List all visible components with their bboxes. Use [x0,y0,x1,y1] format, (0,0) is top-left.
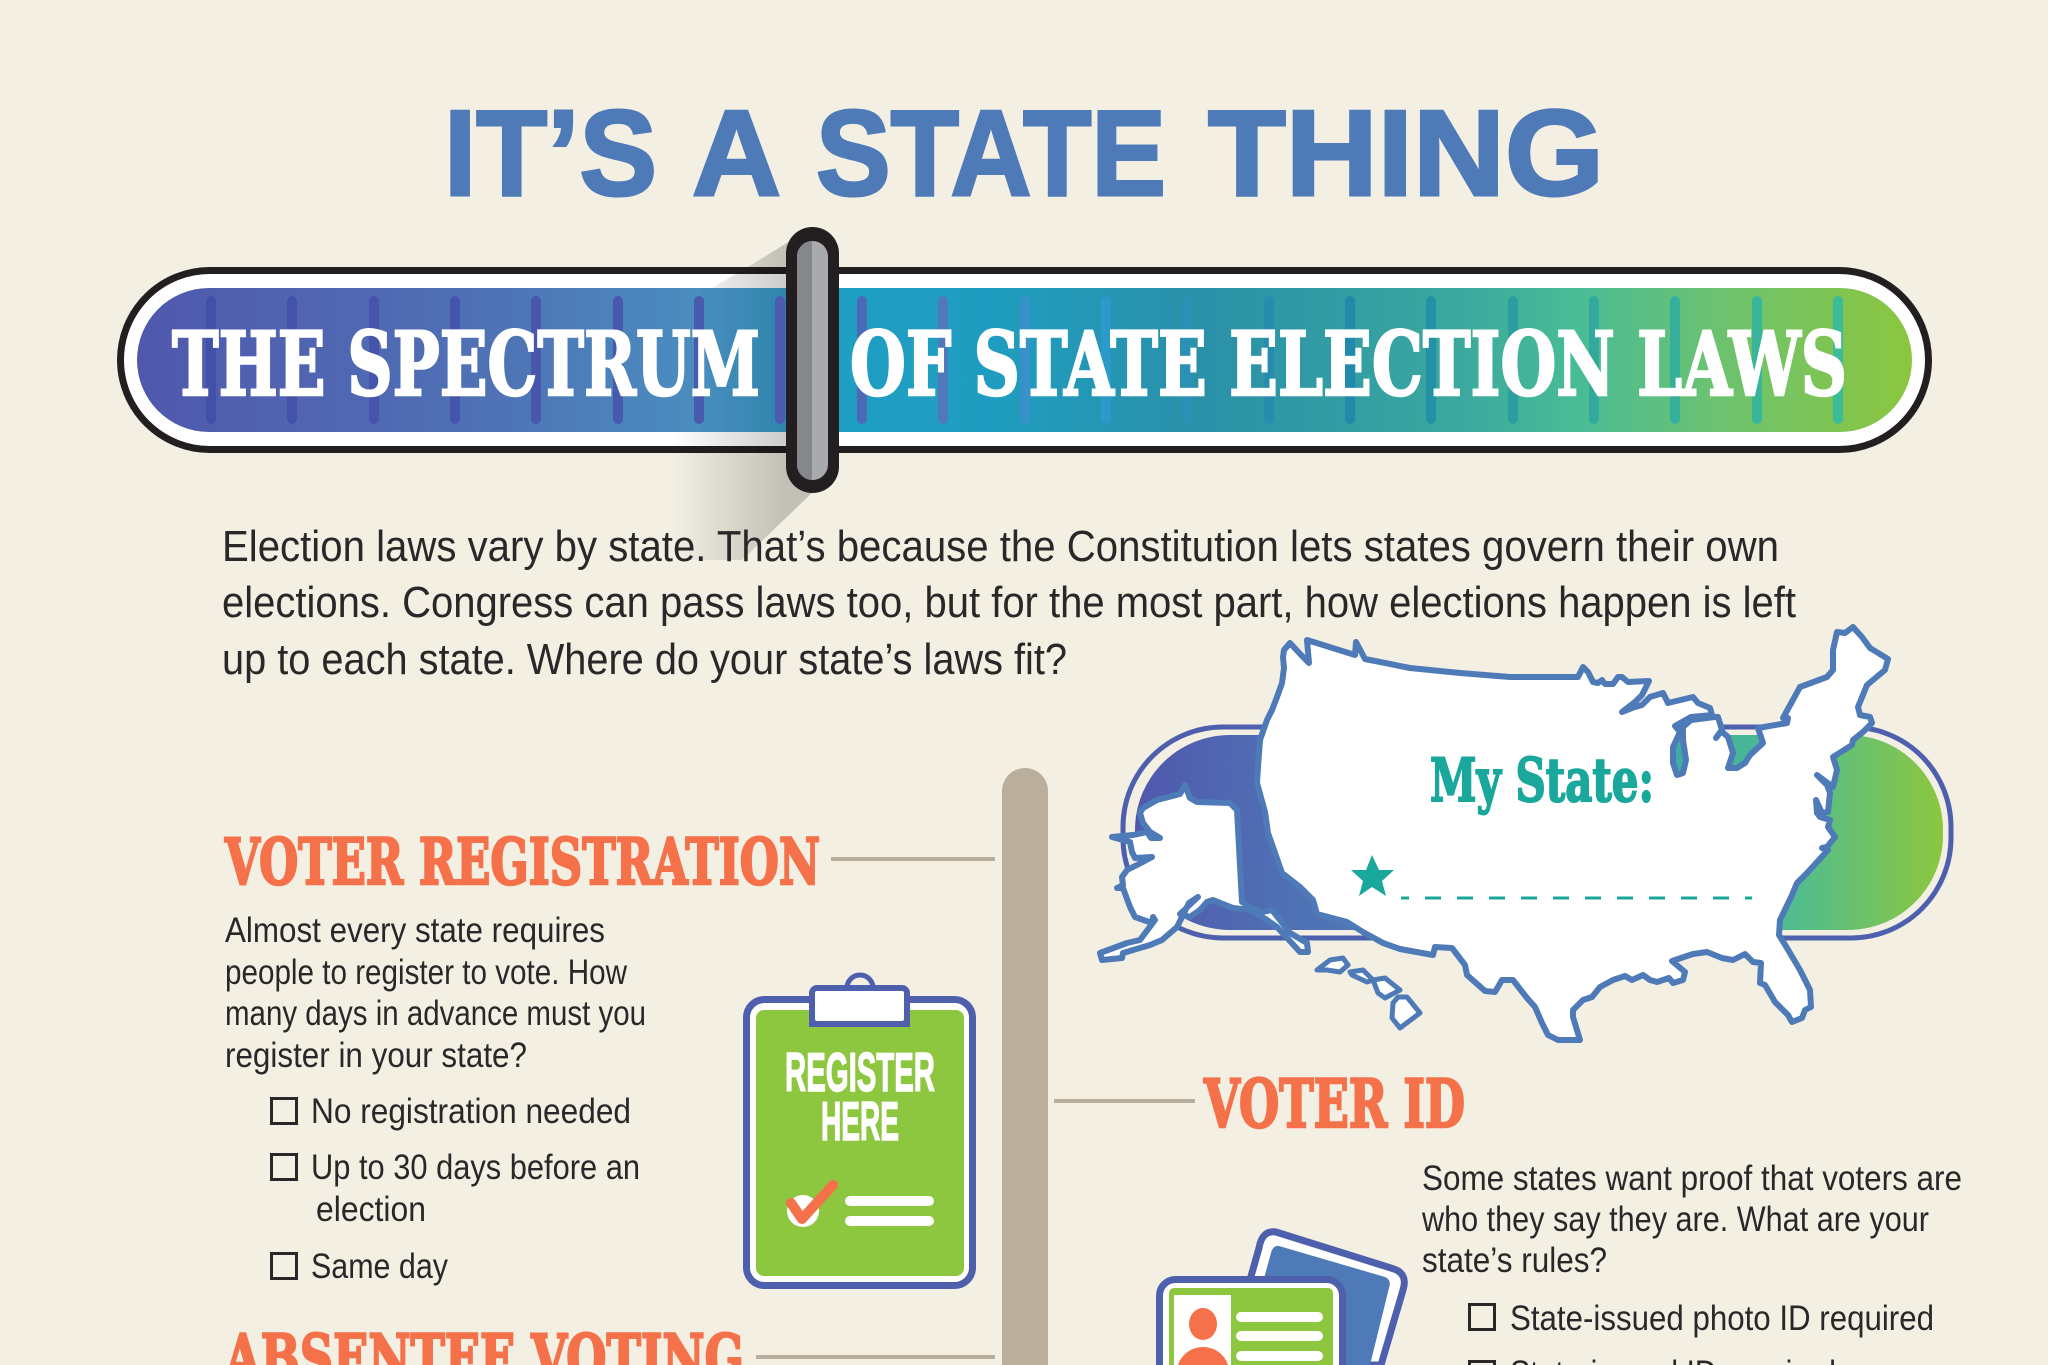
title: STATE [816,85,1166,221]
state write-in line [1401,896,1752,900]
spectrum banner [120,227,1928,560]
options [1470,1299,1934,1365]
title: IT’S [444,85,657,221]
description: Almost every state requires [225,911,605,950]
icon: ID cards [1160,1232,1404,1365]
icon: clipboard [746,975,972,1286]
title: A [692,85,781,221]
description: Some states want proof that voters are [1422,1159,1962,1198]
panel: voter registration [224,825,995,1286]
map of the United States [1100,627,1888,1040]
panel: voter ID [1054,1065,1962,1365]
options: No registration needed [311,1092,631,1131]
connector [1054,1099,1195,1103]
my state label: My State: [1430,746,1654,816]
description [225,911,646,1075]
options: election [316,1190,426,1229]
description: register in your state? [225,1036,527,1075]
options: Up to 30 days before an [311,1148,640,1187]
description [1421,1159,1962,1280]
heading: VOTER ID [1203,1065,1465,1143]
icon: clipboard: REGISTER [785,1041,935,1103]
description: people to register to vote. How [225,953,628,992]
intro text: elections. Congress can pass laws too, but for the most part, how elections happen is left [222,578,1796,627]
intro text: up to each state. Where do your state’s laws fit? [222,635,1067,684]
description: many days in advance must you [225,994,646,1033]
description: state’s rules? [1422,1241,1607,1280]
my state pill [1123,727,1951,938]
handle shadow [672,241,815,560]
slider handle [786,227,839,493]
heading: VOTER REGISTRATION [224,825,820,900]
intro text [222,522,1796,684]
title [444,85,1604,221]
description: who they say they are. What are your [1421,1200,1929,1239]
title: THING [1208,85,1604,221]
panel: absentee voting [224,1321,995,1365]
options: Same day [311,1247,448,1286]
options: State-issued photo ID required [1510,1299,1934,1338]
icon: clipboard: HERE [821,1090,899,1152]
connector [831,857,995,861]
Alaska [1100,785,1308,960]
options [272,1092,640,1286]
spectrum tick marks [206,296,1843,424]
connector [756,1355,995,1359]
intro text: Election laws vary by state. That’s because the Constitution lets states govern their own [222,522,1779,571]
icon: star [1351,855,1394,896]
banner pill [120,270,1928,450]
Hawaii [1317,958,1420,1028]
banner heading left: THE SPECTRUM [172,312,760,416]
center column [1002,768,1048,1365]
contiguous states [1257,627,1888,1040]
